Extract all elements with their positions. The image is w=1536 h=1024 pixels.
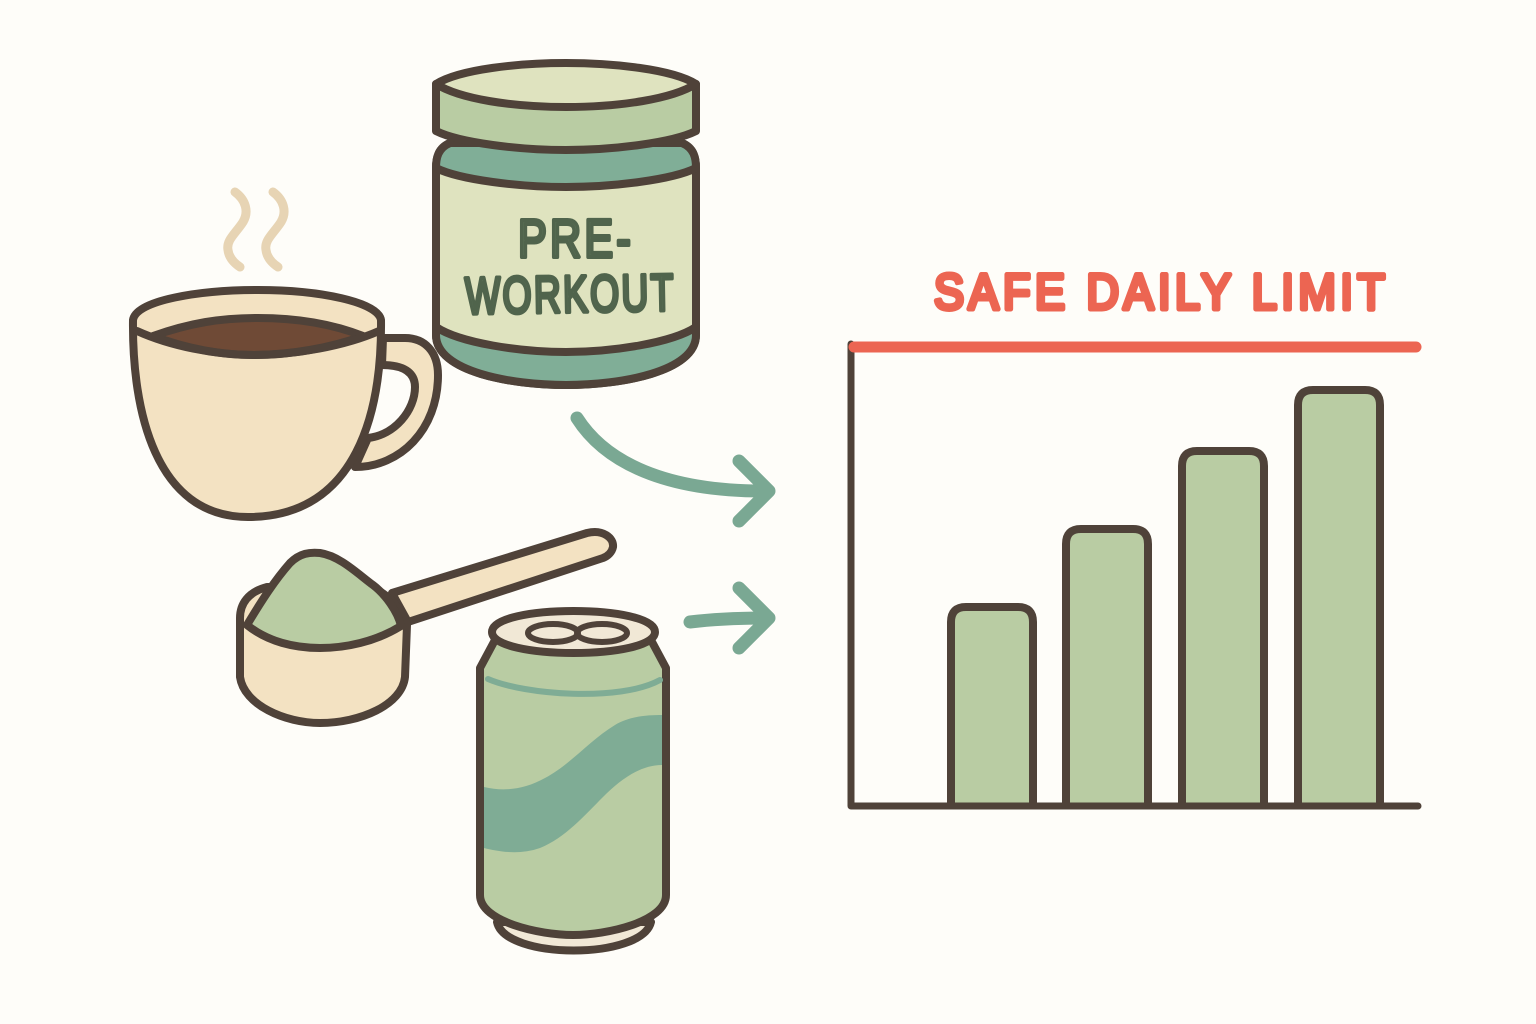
scoop bowl: [240, 587, 407, 723]
arrow: upper: [577, 418, 769, 521]
jar lid side: [436, 84, 696, 150]
cup handle: [355, 338, 438, 467]
bar 2: [1066, 529, 1148, 806]
coffee surface: [153, 318, 363, 355]
bar 3: [1182, 451, 1264, 806]
can stripe: [488, 679, 660, 694]
cup body: [133, 290, 381, 517]
pull tab: [528, 624, 627, 642]
arrow: lower: [690, 588, 769, 648]
can body: [480, 640, 666, 935]
safe limit line: [854, 342, 1416, 352]
icon: pre-workout jar: [436, 63, 696, 385]
jar neck band: [436, 143, 696, 187]
cup front rim: [137, 331, 379, 355]
icon: soda can: [480, 611, 666, 950]
icon: scoop with powder: [240, 532, 613, 723]
jar label text: WORKOUT: [464, 263, 676, 325]
can lid: [492, 611, 655, 653]
icon: steam: [228, 192, 284, 267]
jar lid top: [436, 63, 696, 107]
can wave: [484, 715, 662, 852]
icon: coffee cup: [133, 290, 438, 517]
jar body: [436, 143, 696, 385]
bar 4: [1298, 390, 1380, 806]
bar 1: [951, 607, 1033, 806]
jar label text: PRE-: [518, 210, 634, 269]
chart axes: [851, 344, 1418, 806]
bar chart: [851, 344, 1418, 806]
scoop handle: [392, 532, 613, 622]
jar bottom band: [436, 327, 696, 385]
can base: [497, 922, 651, 950]
jar label text: [464, 210, 676, 325]
powder mound: [247, 553, 401, 648]
chart heading: SAFE DAILY LIMIT: [934, 265, 1389, 321]
